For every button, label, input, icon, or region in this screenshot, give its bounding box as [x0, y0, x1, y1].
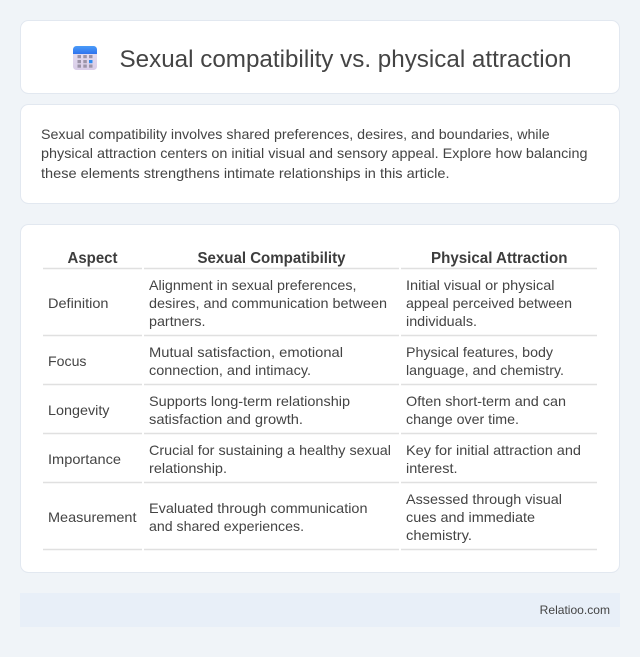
row: measurement: cues and immediate — [406, 509, 535, 525]
row: definition: individuals. — [406, 313, 477, 329]
title: Sexual compatibility vs. physical attraction — [120, 46, 572, 73]
intro text — [41, 126, 588, 181]
row: longevity: Supports long-term relationship — [149, 393, 350, 409]
intro text: physical attraction centers on initial visual and sensory appeal. Explore how balancing — [41, 145, 588, 161]
row: longevity: change over time. — [406, 411, 519, 427]
row: definition — [43, 277, 597, 336]
row: focus — [43, 344, 597, 384]
footer bar — [20, 593, 620, 627]
row: importance: relationship. — [149, 460, 227, 476]
row: definition: Initial visual or physical — [406, 277, 554, 293]
intro text: these elements strengthens intimate relationships in this article. — [41, 165, 450, 181]
row: focus: Mutual satisfaction, emotional — [149, 344, 343, 360]
row: definition: Definition — [48, 295, 108, 311]
row: importance: interest. — [406, 460, 458, 476]
row: longevity: satisfaction and growth. — [149, 411, 303, 427]
intro text: Sexual compatibility involves shared preferences, desires, and boundaries, while — [41, 126, 550, 142]
row: focus: connection, and intimacy. — [149, 362, 311, 378]
row: definition: appeal perceived between — [406, 295, 572, 311]
row: definition: partners. — [149, 313, 206, 329]
row: measurement: Assessed through visual — [406, 491, 562, 507]
icon: calendar — [73, 46, 97, 70]
row: measurement: chemistry. — [406, 527, 472, 543]
row: definition: Alignment in sexual preferences, — [149, 277, 356, 293]
panel: introduction — [20, 104, 620, 204]
row: importance: Crucial for sustaining a healthy sexual — [149, 442, 391, 458]
table header row — [43, 250, 597, 268]
row: focus: Focus — [48, 353, 86, 369]
footer brand text: Relatioo.com — [540, 603, 610, 617]
panel: header — [20, 20, 620, 94]
row: longevity — [43, 393, 597, 434]
row: longevity: Longevity — [48, 402, 110, 418]
panel: comparison table — [20, 224, 620, 572]
row: measurement: Measurement — [48, 509, 137, 525]
table header row: Aspect — [68, 250, 118, 267]
row: focus: Physical features, body — [406, 344, 553, 360]
table header row: Sexual Compatibility — [198, 250, 346, 267]
table header row: Physical Attraction — [431, 250, 568, 267]
row: definition: desires, and communication between — [149, 295, 387, 311]
row: importance: Importance — [48, 451, 121, 467]
row: measurement: Evaluated through communication — [149, 500, 368, 516]
row: importance: Key for initial attraction and — [406, 442, 581, 458]
row: importance — [43, 442, 597, 482]
row: longevity: Often short-term and can — [406, 393, 566, 409]
row: measurement — [43, 491, 597, 550]
row: measurement: and shared experiences. — [149, 518, 304, 534]
row: focus: language, and chemistry. — [406, 362, 564, 378]
